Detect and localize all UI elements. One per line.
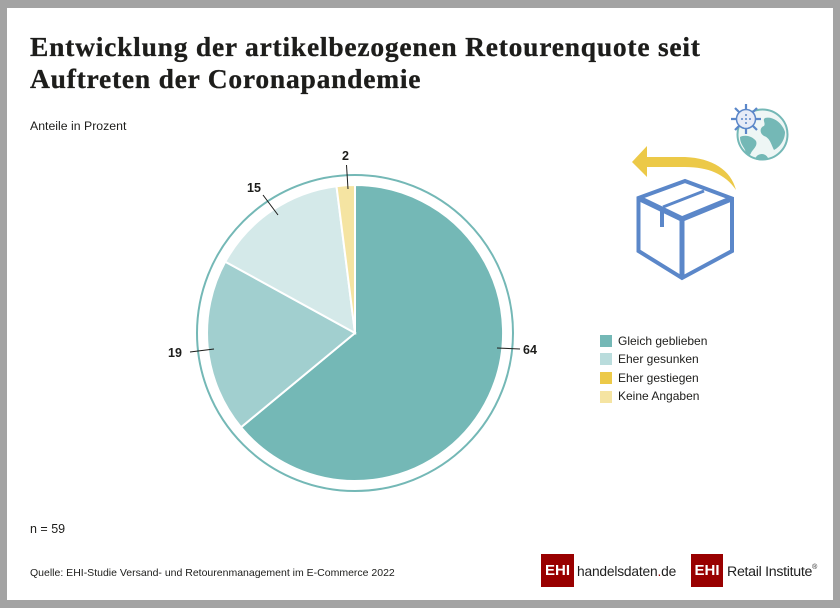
title bbox=[30, 31, 701, 94]
logo: EHI Retail Institute: EHI bbox=[694, 562, 720, 579]
pie chart: 19 bbox=[168, 346, 182, 360]
logo: EHI handelsdaten.de: handelsdaten.de bbox=[577, 564, 676, 579]
legend item: Gleich geblieben: Gleich geblieben bbox=[618, 334, 707, 348]
legend item: Eher gestiegen: Eher gestiegen bbox=[618, 371, 699, 385]
icon: globe with virus bbox=[731, 104, 788, 160]
logo: EHI handelsdaten.de: EHI bbox=[545, 562, 570, 579]
pie chart: 15 bbox=[247, 181, 261, 195]
legend item: Eher gesunken: Eher gesunken bbox=[618, 352, 699, 366]
sample size note: n = 59 bbox=[30, 522, 65, 536]
logo: EHI Retail Institute: Retail Institute® bbox=[727, 564, 817, 580]
source: Quelle: EHI-Studie Versand- und Retourenmanagement im E-Commerce 2022 bbox=[30, 567, 395, 579]
title: Auftreten der Coronapandemie bbox=[30, 63, 421, 94]
legend item: Keine Angaben: Keine Angaben bbox=[618, 389, 699, 403]
logo: EHI handelsdaten.de bbox=[541, 554, 676, 587]
pie chart: 2 bbox=[342, 149, 349, 163]
title: Entwicklung der artikelbezogenen Retourenquote seit bbox=[30, 31, 701, 62]
legend bbox=[600, 334, 707, 403]
pie chart: 64 bbox=[523, 343, 537, 357]
icon: returned parcel with arrow bbox=[632, 146, 736, 278]
logo: EHI Retail Institute bbox=[691, 554, 818, 587]
subtitle: Anteile in Prozent bbox=[30, 119, 126, 133]
